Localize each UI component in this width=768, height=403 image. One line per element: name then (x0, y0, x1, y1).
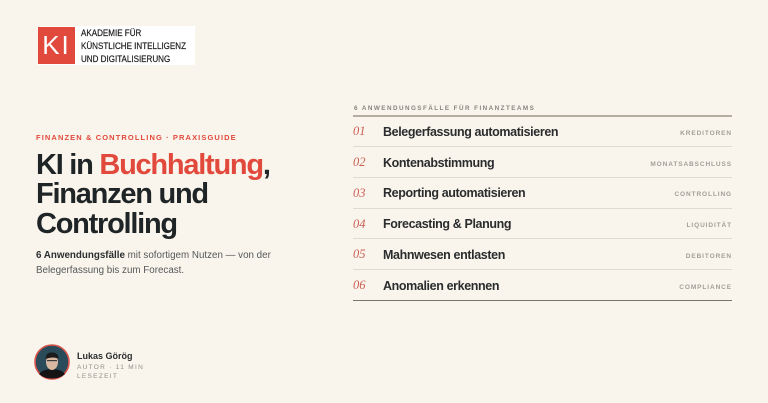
row 5: 05 (353, 247, 366, 261)
row 1 (353, 124, 732, 139)
row 3: Reporting automatisieren (383, 186, 525, 200)
logo text: UND DIGITALISIERUNG (81, 54, 170, 64)
title: Finanzen und (36, 178, 208, 210)
row 2 (353, 155, 732, 170)
logo (38, 26, 195, 65)
title: Controlling (36, 208, 177, 240)
row 3: 03 (353, 186, 366, 200)
row 4: LIQUIDITÄT (687, 222, 732, 229)
row 5: Mahnwesen entlasten (383, 248, 505, 262)
logo mark: KI (42, 30, 71, 60)
eyebrow: FINANZEN & CONTROLLING · PRAXISGUIDE (36, 133, 237, 142)
subtitle (36, 250, 271, 276)
subtitle: Belegerfassung bis zum Forecast. (36, 264, 184, 276)
row 4 (353, 217, 732, 231)
icon: author portrait (34, 344, 70, 380)
row 6 (353, 278, 732, 293)
row 5 (353, 247, 732, 262)
title (36, 149, 270, 240)
row 2: 02 (353, 155, 366, 169)
row 2: Kontenabstimmung (383, 156, 494, 170)
row 4: Forecasting & Planung (383, 217, 511, 231)
title: KI in Buchhaltung, (36, 149, 270, 181)
row 3: CONTROLLING (674, 191, 732, 198)
logo text (80, 28, 186, 64)
row 1: KREDITOREN (680, 130, 732, 137)
author (34, 344, 144, 380)
list heading: 6 ANWENDUNGSFÄLLE FÜR FINANZTEAMS (354, 105, 535, 112)
logo text: KÜNSTLICHE INTELLIGENZ (81, 40, 186, 50)
author meta (77, 364, 144, 380)
row 6: COMPLIANCE (679, 284, 732, 291)
logo mark (38, 27, 75, 64)
author name: Lukas Görög (77, 351, 133, 361)
row 4: 04 (353, 217, 366, 231)
row 2: MONATSABSCHLUSS (650, 161, 732, 168)
row 1: 01 (353, 124, 366, 138)
row 6: Anomalien erkennen (383, 279, 499, 293)
row 3 (353, 186, 732, 200)
author meta: LESEZEIT (77, 373, 118, 380)
row 6: 06 (353, 278, 366, 292)
logo text: AKADEMIE FÜR (81, 28, 141, 38)
row 1: Belegerfassung automatisieren (383, 125, 558, 139)
row 5: DEBITOREN (686, 253, 732, 260)
subtitle: 6 Anwendungsfälle mit sofortigem Nutzen — von der (36, 250, 271, 261)
author meta: AUTOR · 11 MIN (77, 364, 144, 371)
